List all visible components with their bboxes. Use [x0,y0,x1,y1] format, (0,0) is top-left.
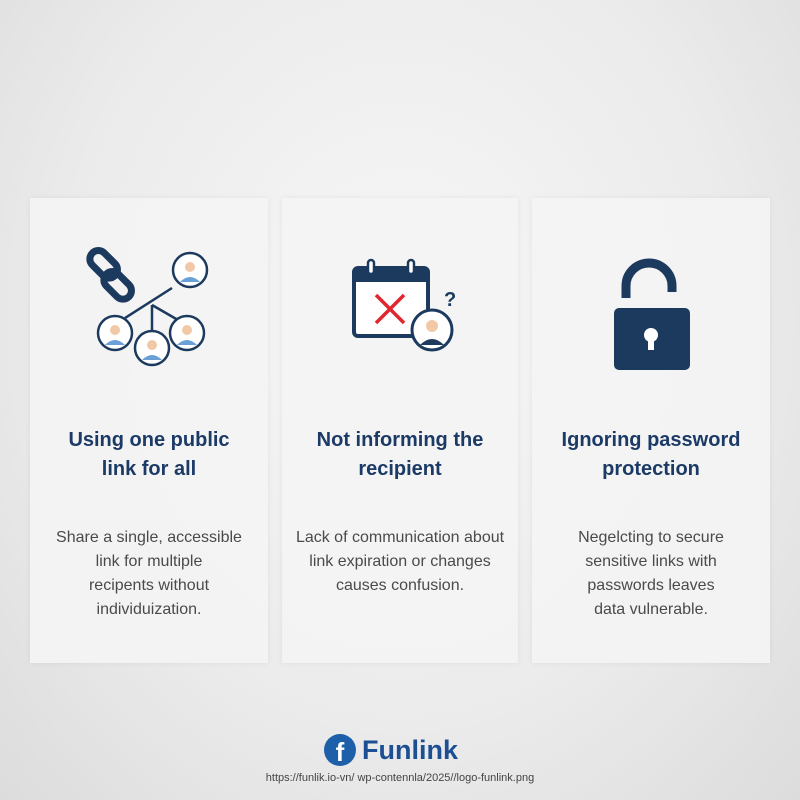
icon: calendar with x [354,260,456,350]
heading: not informing: Not informing the [317,429,483,451]
text: not informing: causes confusion. [336,577,464,594]
heading: not informing [317,429,483,480]
text: password: sensitive links with [585,553,717,570]
icon: open lock [614,263,690,370]
url caption: https://funlik.io-vn/ wp-contennla/2025//logo-funlink.png [266,772,534,784]
panel: password [532,198,770,663]
text: public link: Share a single, accessible [56,529,242,546]
brand name: Funlink [362,735,458,765]
text: not informing: Lack of communication about [296,529,504,546]
icon: facebook circle [324,734,356,766]
heading: public link: Using one public [68,429,230,451]
icon: chain and people [86,247,207,365]
panel: not informing [282,198,518,663]
text: password: Negelcting to secure [578,529,724,546]
heading: public link [68,429,230,480]
heading: password: Ignoring password [562,429,740,451]
text: password: passwords leaves [587,577,715,594]
text: not informing: link expiration or changes [309,553,491,570]
heading: not informing: recipient [358,458,442,480]
text: not informing [296,529,504,594]
heading: public link: link for all [102,458,196,480]
text: public link: individuization. [97,601,201,618]
heading: password: protection [602,458,700,480]
logo [324,734,458,767]
text: password [578,529,724,618]
text: public link [56,529,242,618]
heading: password [562,429,740,480]
text: password: data vulnerable. [594,601,708,618]
icon: facebook circle: f [336,737,344,767]
icon: calendar with x: ? [444,289,456,311]
text: public link: link for multiple [96,553,202,570]
panel: public link [30,198,268,663]
text: public link: recipents without [89,577,209,594]
